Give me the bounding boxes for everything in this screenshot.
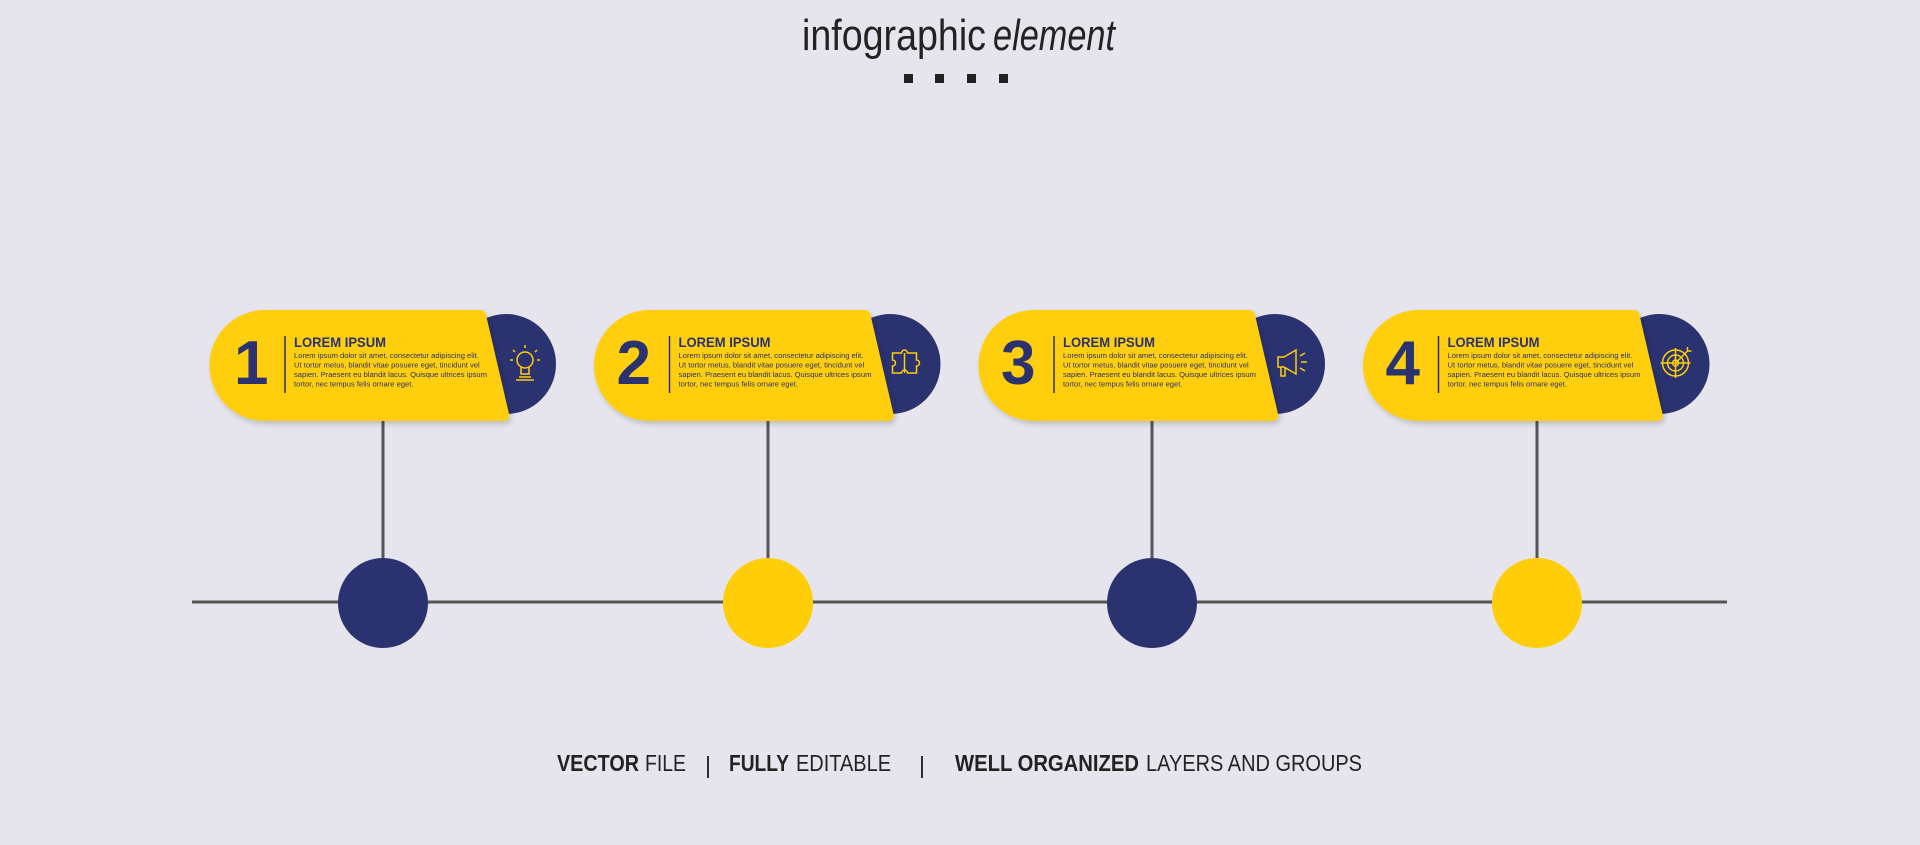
card 2 — [594, 310, 940, 421]
footer text: FULLY — [729, 750, 789, 776]
card 1 — [210, 310, 556, 421]
stems — [383, 421, 1537, 560]
icon: target — [1660, 347, 1692, 378]
title: infographic — [802, 11, 986, 60]
footer text: LAYERS AND GROUPS — [1146, 750, 1362, 776]
title: element — [993, 11, 1116, 60]
icon: light bulb — [510, 345, 540, 380]
card 2: 2 — [616, 329, 651, 398]
card 1: 1 — [234, 329, 268, 398]
icon: puzzle — [892, 350, 920, 373]
card 4 — [1363, 310, 1710, 421]
footer text — [557, 750, 1362, 778]
timeline line — [192, 600, 1727, 604]
card 3 — [978, 310, 1325, 421]
title — [802, 11, 1116, 60]
timeline circles — [338, 558, 1582, 648]
card 3: 3 — [1001, 329, 1035, 398]
footer text: VECTOR — [557, 750, 639, 776]
icon: megaphone — [1278, 350, 1307, 376]
footer text: | — [705, 752, 711, 778]
footer text: FILE — [645, 750, 686, 776]
footer text: | — [919, 752, 925, 778]
footer text: EDITABLE — [796, 750, 891, 776]
card 4: 4 — [1386, 329, 1420, 398]
footer text: WELL ORGANIZED — [955, 750, 1139, 776]
title dots — [904, 74, 1008, 83]
